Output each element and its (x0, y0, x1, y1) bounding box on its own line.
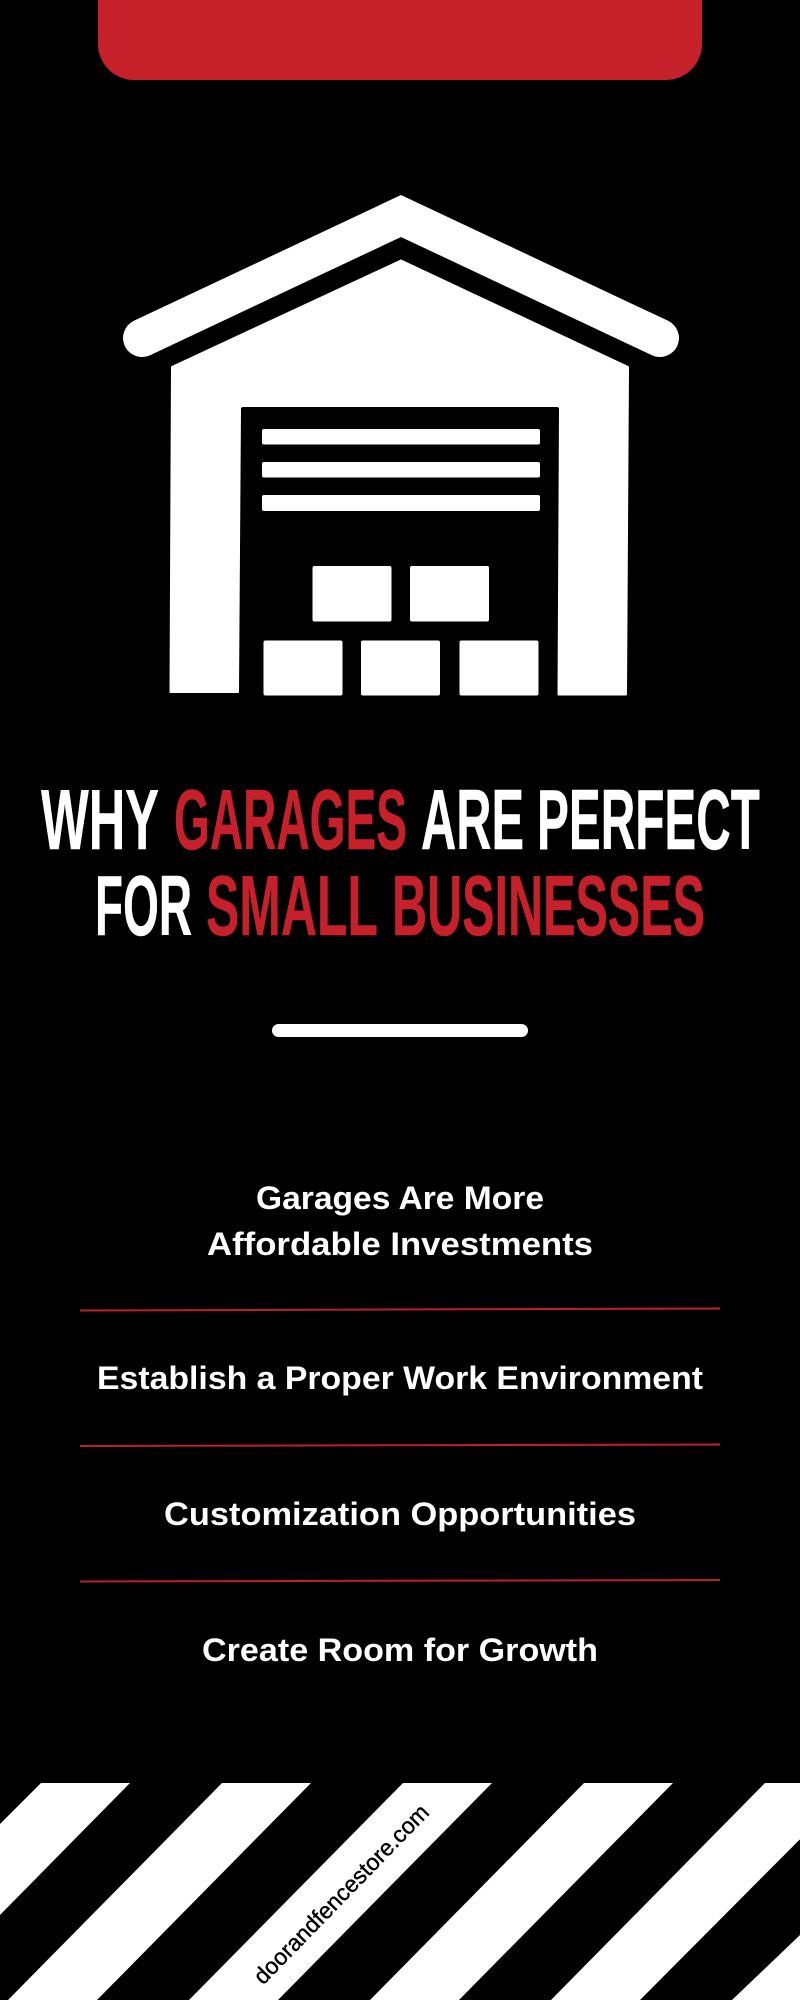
icon: stacked boxes (264, 566, 538, 696)
title: GARAGES (174, 773, 407, 868)
red separator line 2 (80, 1444, 720, 1446)
list item: customization: Customization Opportunities (164, 1496, 636, 1532)
red separator line 3 (80, 1580, 720, 1582)
icon: garage building (170, 260, 628, 694)
website url: doorandfencestore.com (248, 1799, 434, 1989)
icon: roof (142, 216, 660, 338)
list item: room for growth: Create Room for Growth (202, 1632, 598, 1668)
icon: door slats (262, 429, 540, 511)
diagonal stripe band (0, 1783, 800, 2000)
list item: affordable investments: Garages Are More (256, 1180, 544, 1216)
title: ARE (421, 773, 524, 868)
title: SMALL (206, 859, 378, 954)
list item: affordable investments: Affordable Investments (207, 1226, 593, 1262)
red separator line 1 (80, 1308, 720, 1310)
white divider bar (272, 1024, 528, 1037)
list item: work environment: Establish a Proper Work Environment (97, 1360, 703, 1396)
icon: garage with boxes (142, 216, 660, 696)
title (41, 773, 760, 954)
title: WHY (41, 773, 159, 868)
title: FOR (95, 859, 192, 954)
red top banner (98, 0, 702, 80)
